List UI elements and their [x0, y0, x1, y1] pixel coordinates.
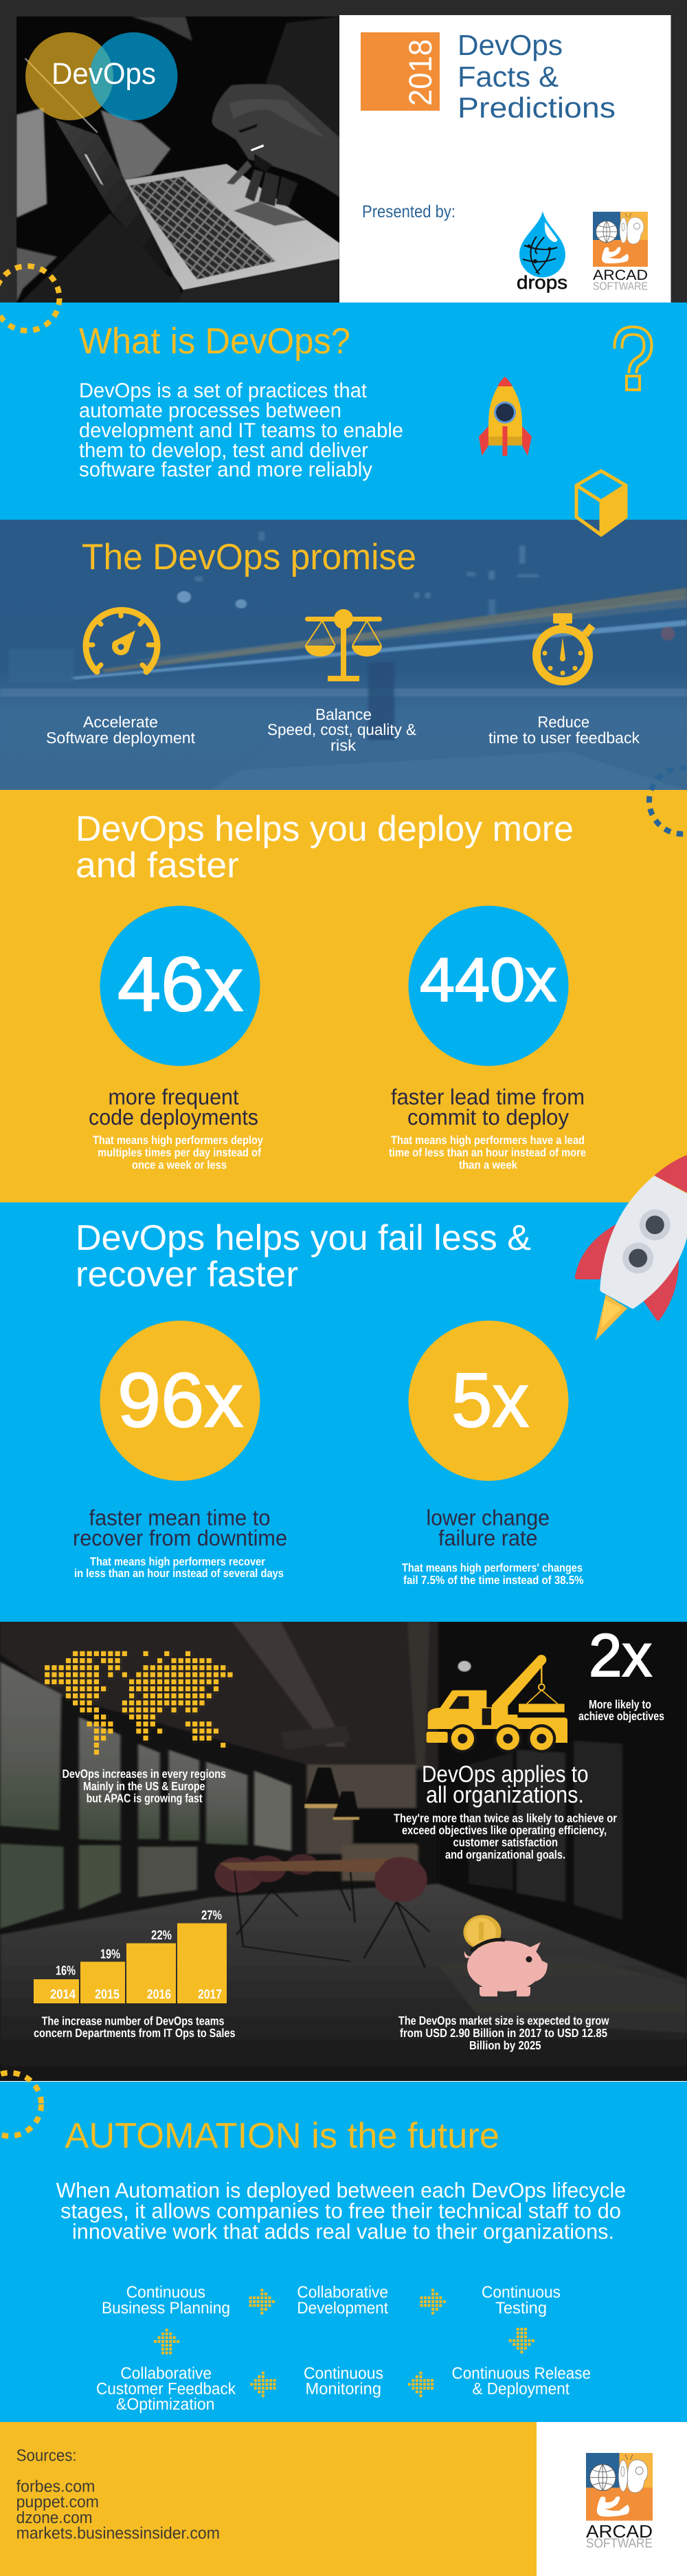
text: DevOps applies to all organizations: exceed objectives like operating efficiency,: [402, 1823, 607, 1837]
caption: code deployments: once a week or less: [132, 1158, 227, 1171]
definition text: DevOps is a set of practices that: [79, 379, 368, 402]
automation text: When Automation is deployed between each DevOps lifecycle: [56, 2178, 626, 2203]
label: balance: Balance: [315, 705, 372, 723]
icon: piggy bank: [463, 1915, 548, 1996]
automation text: stages, it allows companies to free their technical staff to do: [60, 2199, 621, 2223]
heading: [76, 809, 574, 885]
caption: market size: from USD 2.90 Billion in 2017 to USD 12.85: [400, 2026, 607, 2040]
title: Facts &: [458, 60, 559, 93]
arrow: planning to development: [249, 2289, 275, 2314]
heading: recover faster: [76, 1255, 298, 1295]
icon: balance scales: [305, 609, 382, 681]
caption: regions: [62, 1767, 226, 1805]
caption: code deployments: [89, 1085, 263, 1171]
flow step: customer feedback: [96, 2364, 236, 2414]
flow step: monitoring: Continuous: [304, 2364, 383, 2383]
caption: regions: but APAC is growing fast: [87, 1792, 203, 1805]
caption: code deployments: That means high performers deploy: [93, 1134, 263, 1147]
caption: regions: Mainly in the US & Europe: [83, 1779, 205, 1793]
bar chart: DevOps teams by year: 2014: [50, 1988, 76, 2002]
caption: teams: [34, 2014, 236, 2040]
header photo: laptop and hands: [16, 16, 339, 302]
caption: lead time: commit to deploy: [407, 1105, 569, 1130]
definition text: automate processes between: [79, 399, 341, 422]
text: DevOps applies to all organizations: They're more than twice as likely to achieve or: [394, 1811, 617, 1825]
label: balance: [267, 705, 416, 754]
automation text: innovative work that adds real value to their organizations.: [72, 2220, 614, 2244]
sources list: puppet.com: [16, 2493, 99, 2511]
logo: ARCAD Software footer: [586, 2453, 653, 2551]
sources list: markets.businessinsider.com: [16, 2524, 220, 2542]
definition text: development and IT teams to enable: [79, 419, 403, 442]
logo: ARCAD Software: [593, 212, 648, 293]
stat: 46x: [100, 906, 260, 1066]
caption: code deployments: code deployments: [89, 1105, 258, 1130]
flow step: customer feedback: &Optimization: [116, 2395, 214, 2414]
panel: what is DevOps: [0, 302, 687, 520]
heading: automation: AUTOMATION is the future: [65, 2116, 499, 2156]
year badge: 2018: [402, 39, 438, 106]
caption: failure rate: lower change: [426, 1506, 550, 1530]
bar chart: DevOps teams by year: 19%: [100, 1948, 120, 1962]
heading: [76, 1218, 531, 1295]
flow step: release: & Deployment: [473, 2380, 570, 2399]
label: accelerate: Accelerate: [83, 713, 158, 731]
caption: market size: [398, 2014, 609, 2052]
title: [458, 29, 616, 124]
decoration: dashed circle bottom: [0, 2073, 41, 2136]
stat: 5x: 5x: [451, 1357, 529, 1443]
caption: lead time: [389, 1085, 586, 1171]
decoration: dashed circle top: [0, 266, 59, 331]
flow step: customer feedback: Customer Feedback: [96, 2380, 236, 2399]
heading: the DevOps promise: The DevOps promise: [82, 537, 416, 577]
panel: fail less and recover faster: [0, 1202, 687, 1622]
text: DevOps applies to all organizations: [394, 1761, 617, 1861]
logo: ARCAD Software footer: ARCAD: [586, 2521, 653, 2542]
year badge: [361, 32, 440, 111]
panel: deploy more and faster: [0, 790, 687, 1202]
logo: drops: drops: [517, 272, 567, 293]
arrow: development to testing: [420, 2289, 446, 2314]
title: Predictions: [458, 91, 616, 124]
white title panel: [339, 15, 671, 302]
heading: DevOps helps you fail less &: [76, 1218, 531, 1258]
bar chart: DevOps teams by year: 2015: [95, 1988, 120, 2002]
caption: more likely: [578, 1697, 664, 1723]
automation text: [56, 2178, 626, 2244]
caption: failure rate: That means high performers' changes: [402, 1561, 583, 1574]
icon: large rocket: [575, 1155, 687, 1341]
logo: ARCAD Software: SOFTWARE: [593, 280, 648, 293]
flow step: business planning: [102, 2283, 230, 2318]
caption: lead time: than a week: [459, 1158, 517, 1171]
flow step: release: Continuous Release: [452, 2364, 591, 2383]
decoration: navy dashed circle: [649, 768, 687, 834]
flow step: customer feedback: Collaborative: [120, 2364, 212, 2383]
caption: failure rate: failure rate: [438, 1526, 537, 1550]
definition text: them to develop, test and deliver: [79, 439, 368, 462]
caption: recovery time: [73, 1506, 287, 1580]
bar chart: DevOps teams by year: 16%: [56, 1963, 76, 1979]
stat: 5x: [408, 1321, 569, 1481]
arrow: release to monitoring: [408, 2372, 433, 2397]
arrow: feedback up to planning: [154, 2329, 179, 2354]
caption: recovery time: That means high performers recover: [90, 1555, 265, 1568]
bar chart: DevOps teams by year: 2017: [198, 1988, 222, 2002]
flow step: testing: [482, 2283, 561, 2318]
caption: failure rate: fail 7.5% of the time instead of 38.5%: [403, 1574, 584, 1587]
panel: office photo section: [0, 1621, 687, 2081]
panel: the DevOps promise: [0, 520, 687, 790]
flow step: development: Development: [297, 2299, 388, 2318]
world map: pixel grid: [45, 1651, 235, 1757]
caption: regions: DevOps increases in every regions: [62, 1767, 226, 1781]
sources list: [16, 2446, 220, 2542]
label: reduce: Reduce: [537, 713, 589, 731]
label: reduce: [488, 713, 640, 747]
background photo: office: [0, 1622, 687, 2081]
sources list: Sources:: [16, 2446, 77, 2465]
heading: and faster: [76, 846, 239, 885]
flow step: testing: Testing: [495, 2299, 547, 2318]
text: DevOps applies to all organizations: and organizational goals.: [445, 1847, 565, 1861]
caption: lead time: That means high performers have a lead: [391, 1134, 585, 1147]
flow step: release: [452, 2364, 591, 2399]
stat: 2x: 2x: [589, 1621, 652, 1689]
stat: 440x: 440x: [420, 946, 556, 1015]
icon: crane truck: [427, 1655, 567, 1753]
text: DevOps applies to all organizations: all organizations.: [426, 1782, 584, 1808]
panel: sources footer: [0, 2422, 687, 2576]
panel: automation: [0, 2082, 687, 2422]
caption: teams: concern Departments from IT Ops to Sales: [34, 2026, 236, 2040]
icon: cube: [576, 471, 627, 536]
caption: market size: Billion by 2025: [469, 2038, 541, 2052]
bar chart: DevOps teams by year: [34, 1908, 227, 2003]
label: accelerate: Software deployment: [46, 729, 196, 747]
sources list: forbes.com: [16, 2478, 95, 2496]
logo: ARCAD Software: ARCAD: [593, 267, 648, 283]
icon: speedometer: [86, 610, 157, 672]
bar chart: DevOps teams by year: 22%: [151, 1928, 172, 1943]
presented by: Presented by:: [362, 202, 455, 221]
caption: lead time: time of less than an hour instead of more: [389, 1146, 586, 1159]
logo: ARCAD Software footer: SOFTWARE: [586, 2537, 653, 2551]
logo: overlapping DevOps circles: DevOps: [52, 57, 156, 91]
icon: question mark: [618, 331, 648, 390]
text: DevOps applies to all organizations: DevOps applies to: [422, 1761, 588, 1787]
flow step: development: Collaborative: [297, 2283, 388, 2302]
label: accelerate: [46, 713, 196, 747]
flow step: monitoring: Monitoring: [305, 2380, 381, 2399]
street photo texture: [0, 531, 687, 740]
logo: overlapping DevOps circles: [25, 32, 177, 120]
stat: 46x: 46x: [117, 941, 243, 1027]
flow step: business planning: Business Planning: [102, 2299, 230, 2318]
caption: more likely: More likely to: [589, 1697, 651, 1711]
caption: teams: The increase number of DevOps teams: [42, 2014, 225, 2027]
caption: lead time: faster lead time from: [391, 1085, 585, 1110]
label: reduce: time to user feedback: [488, 729, 640, 747]
icon: stopwatch: [537, 613, 595, 681]
caption: recovery time: faster mean time to: [89, 1506, 271, 1530]
caption: code deployments: multiples times per day instead of: [98, 1146, 261, 1159]
caption: market size: The DevOps market size is expected to grow: [398, 2014, 609, 2027]
title: DevOps: [458, 29, 563, 61]
header band: [0, 0, 687, 302]
flow step: testing: Continuous: [482, 2283, 561, 2302]
definition text: [79, 379, 403, 481]
label: balance: risk: [330, 736, 357, 754]
logo: drops: [517, 211, 567, 293]
flow step: monitoring: [304, 2364, 383, 2399]
bar chart: DevOps teams by year: 27%: [201, 1908, 222, 1923]
flow step: business planning: Continuous: [126, 2283, 205, 2302]
stat: 96x: [100, 1321, 260, 1481]
flow step: development: [297, 2283, 388, 2318]
caption: code deployments: more frequent: [109, 1085, 239, 1110]
definition text: software faster and more reliably: [79, 459, 372, 481]
text: DevOps applies to all organizations: customer satisfaction: [453, 1836, 558, 1849]
heading: what is DevOps: What is DevOps?: [79, 321, 350, 362]
icon: small rocket: [479, 377, 532, 456]
caption: failure rate: [402, 1506, 584, 1587]
sources list: dzone.com: [16, 2509, 93, 2527]
bar chart: DevOps teams by year: 2016: [147, 1988, 171, 2002]
heading: DevOps helps you deploy more: [76, 809, 574, 849]
label: balance: Speed, cost, quality &: [267, 720, 416, 738]
arrow: monitoring to feedback: [250, 2372, 276, 2397]
caption: more likely: achieve objectives: [578, 1709, 664, 1723]
arrow: testing down to release: [509, 2328, 534, 2353]
caption: recovery time: recover from downtime: [73, 1526, 287, 1550]
stat: 440x: [408, 906, 569, 1066]
stat: 96x: 96x: [117, 1357, 243, 1443]
caption: recovery time: in less than an hour instead of several days: [74, 1567, 284, 1580]
